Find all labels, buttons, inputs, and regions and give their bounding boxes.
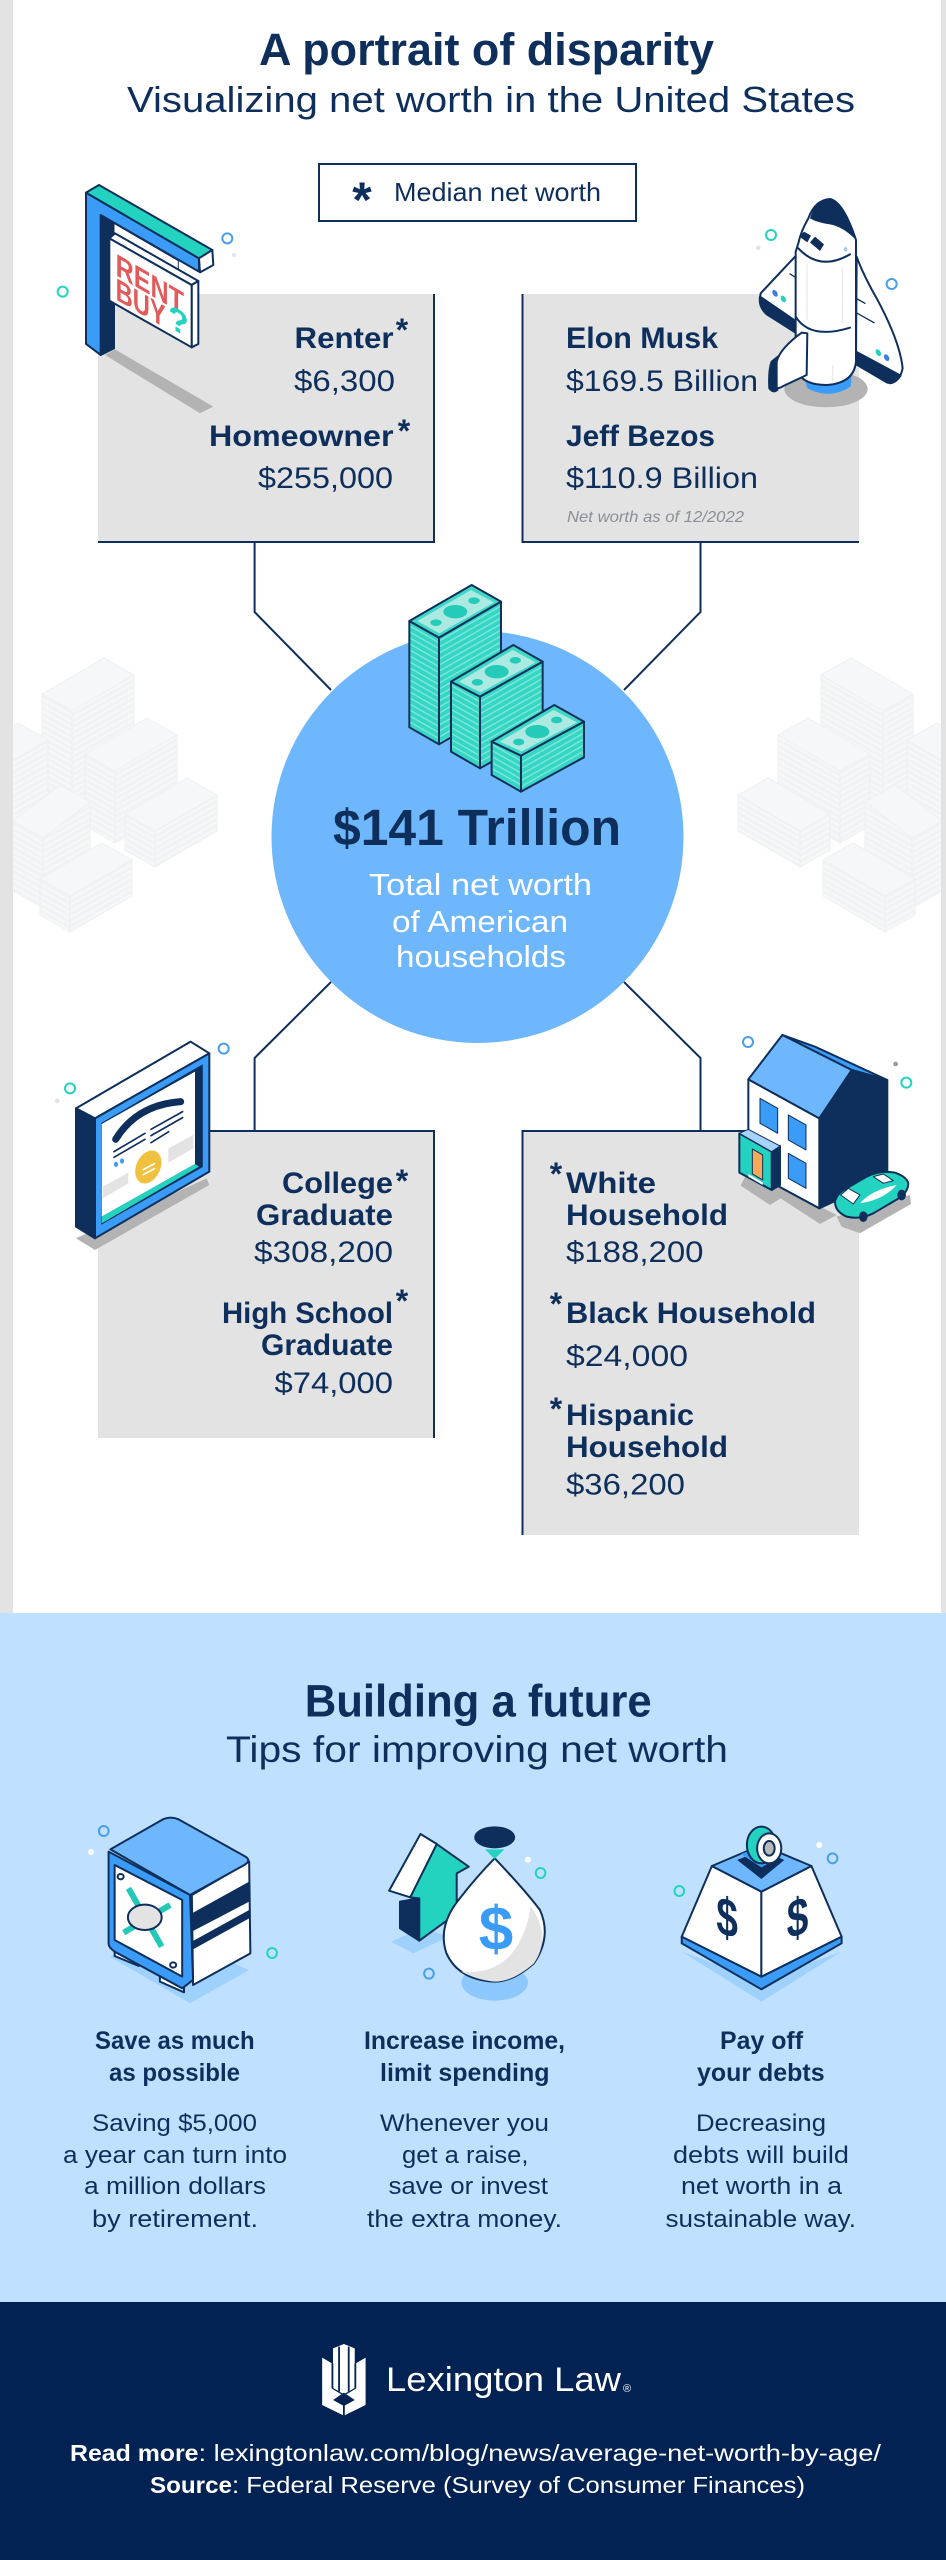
panel: billionaires: [522, 294, 859, 542]
central circle: households: [396, 939, 566, 974]
side strip left: [0, 0, 13, 1613]
icon: rent or buy sign: RENT: [116, 247, 184, 322]
legend: median net worth: [319, 164, 636, 228]
panel: education: High School: [222, 1297, 393, 1330]
panel: renter vs homeowner: *: [398, 413, 411, 449]
section: tips background: [0, 1613, 946, 2302]
panel: households by race: White: [566, 1167, 656, 1200]
panel: renter vs homeowner: Renter: [294, 322, 394, 355]
tip 3: pay off debts: Decreasing: [696, 2110, 826, 2137]
panel: households by race: $24,000: [566, 1340, 688, 1373]
tip 1: save: a million dollars: [84, 2173, 266, 2200]
tip 2: increase income: get a raise,: [402, 2142, 528, 2169]
icon: arrow and money bag: [389, 1826, 545, 2001]
panel: households by race: $36,200: [566, 1468, 685, 1502]
tip 3: pay off debts: [666, 2027, 856, 2233]
panel: renter vs homeowner: *: [396, 312, 409, 348]
icon: stacks of money: [409, 585, 584, 792]
panel: households by race: *: [550, 1156, 563, 1192]
tip 1: save: a year can turn into: [63, 2142, 287, 2169]
panel: households by race: Household: [566, 1431, 728, 1464]
tip 3: pay off debts: debts will build: [673, 2142, 849, 2169]
tip 3: pay off debts: sustainable way.: [666, 2206, 856, 2233]
tip 1: save: by retirement.: [92, 2206, 258, 2233]
panel: education: $74,000: [274, 1367, 393, 1400]
icon: rent or buy sign: [58, 185, 236, 413]
icon: arrow and money bag: $: [479, 1895, 513, 1964]
panel: education: *: [396, 1163, 409, 1199]
tip 1: save: Saving $5,000: [92, 2110, 257, 2137]
central circle: of American: [392, 904, 568, 939]
tips subheading: Tips for improving net worth: [226, 1729, 728, 1770]
central circle: [272, 631, 684, 1043]
tip 2: increase income: Whenever you: [380, 2110, 549, 2137]
logo: Lexington Law: Lexington Law: [386, 2361, 621, 2399]
icon: space shuttle: [756, 199, 903, 407]
panel: households by race: Hispanic: [566, 1399, 694, 1432]
panel: billionaires: $110.9 Billion: [566, 462, 758, 495]
panel: education: *: [396, 1283, 409, 1319]
panel: households by race: $188,200: [566, 1236, 704, 1269]
subtitle: Visualizing net worth in the United States: [127, 79, 855, 120]
legend: median net worth: *: [352, 172, 372, 228]
panel: billionaires: $169.5 Billion: [566, 365, 758, 398]
panel: education: [98, 1131, 434, 1438]
panel: renter vs homeowner: Homeowner: [209, 420, 394, 453]
title: A portrait of disparity: [259, 24, 714, 75]
panel: billionaires: Elon Musk: [566, 322, 718, 355]
tip 2: increase income: limit spending: [380, 2059, 550, 2087]
panel: households by race: Household: [566, 1199, 728, 1232]
panel: renter vs homeowner: [98, 294, 434, 542]
icon: weight with dollar signs: [674, 1827, 842, 2002]
tip 3: pay off debts: Pay off: [720, 2027, 804, 2055]
tip 3: pay off debts: net worth in a: [681, 2173, 843, 2200]
logo: Lexington Law: [322, 2344, 631, 2416]
icon: rent or buy sign: BUY: [116, 271, 166, 336]
tip 2: increase income: the extra money.: [367, 2206, 562, 2233]
footer: source: Source: [150, 2472, 232, 2498]
footer: read more: Read more: [70, 2440, 198, 2466]
icon: weight with dollar signs: $: [716, 1885, 738, 1951]
tip 1: save: [63, 2027, 287, 2233]
logo: Lexington Law: ®: [623, 2383, 631, 2395]
central circle: Total net worth: [369, 867, 592, 902]
icon: rent or buy sign: ?: [168, 296, 189, 346]
footer background: [0, 2302, 946, 2560]
icon: safe: [88, 1818, 277, 2003]
footer: read more: : lexingtonlaw.com/blog/news/average-net-worth-by-age/: [198, 2440, 882, 2466]
tip 2: increase income: Increase income,: [364, 2027, 565, 2055]
icon: diploma: [55, 1042, 229, 1250]
panel: education: Graduate: [261, 1329, 393, 1362]
panel: billionaires: Net worth as of 12/2022: [567, 509, 744, 526]
panel: renter vs homeowner: $6,300: [294, 365, 395, 398]
panel: billionaires: Jeff Bezos: [566, 420, 715, 453]
tip 2: increase income: save or invest: [388, 2173, 548, 2200]
tip 3: pay off debts: your debts: [697, 2059, 825, 2087]
tip 1: save: as possible: [109, 2059, 240, 2087]
panel: education: $308,200: [254, 1236, 393, 1269]
panel: households by race: *: [550, 1286, 563, 1322]
panel: renter vs homeowner: $255,000: [258, 462, 393, 495]
panel: households by race: [522, 1131, 859, 1535]
side strip right: [941, 0, 946, 1613]
icon: weight with dollar signs: $: [787, 1885, 808, 1951]
tips heading: Building a future: [305, 1676, 652, 1727]
background: ghost money stacks left: [0, 658, 217, 932]
footer: source: : Federal Reserve (Survey of Consumer Finances): [232, 2472, 805, 2498]
panel: households by race: Black Household: [566, 1297, 816, 1330]
central circle: $141 Trillion: [333, 799, 621, 856]
connector lines: [255, 542, 700, 1131]
panel: education: College: [282, 1167, 393, 1200]
panel: households by race: *: [550, 1391, 563, 1427]
background: ghost money stacks right: [738, 658, 946, 932]
tip 2: increase income: [364, 2027, 565, 2233]
panel: education: Graduate: [256, 1199, 393, 1232]
tip 1: save: Save as much: [95, 2027, 255, 2055]
legend: median net worth: Median net worth: [394, 177, 601, 207]
icon: house and car: [739, 1035, 911, 1233]
